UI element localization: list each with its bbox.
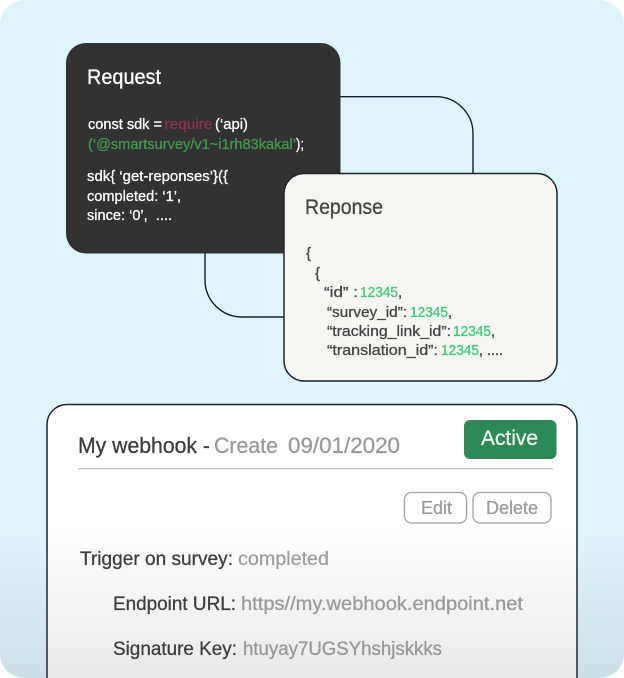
- code: response JSON: 12345: [410, 304, 448, 321]
- field: endpoint URL: [113, 593, 524, 615]
- panel: webhook card: [47, 404, 577, 678]
- heading: Request: Request: [87, 66, 161, 89]
- code: require statement: [88, 116, 304, 153]
- code: response JSON: ,: [491, 323, 495, 340]
- field: endpoint URL: Endpoint URL:: [113, 593, 236, 615]
- code: sdk call: [87, 168, 228, 224]
- code: response JSON: “tracking_link_id”:: [327, 323, 451, 340]
- field: trigger on survey: completed: [238, 548, 329, 570]
- code: response JSON: {: [306, 245, 311, 262]
- code: response JSON: {: [315, 265, 320, 282]
- badge: Active: [464, 420, 556, 459]
- code: response JSON: ,: [448, 304, 452, 321]
- code: sdk call: sdk{ ‘get-reponses’}({: [87, 168, 228, 185]
- connector lines between request and response cards: [205, 97, 473, 317]
- field: trigger on survey: [80, 548, 329, 570]
- code: require statement: const sdk =: [88, 116, 162, 133]
- heading: webhook title and date: Create: [214, 433, 278, 458]
- button: Edit: Edit: [421, 498, 452, 518]
- badge: Active: Active: [481, 427, 538, 450]
- heading: Reponse: Reponse: [305, 196, 383, 219]
- code: response JSON: , ....: [479, 342, 503, 359]
- code: require statement: (‘@smartsurvey/v1~i1rh83kakal’: [88, 136, 296, 153]
- code: sdk call: since: ‘0’, ....: [87, 207, 172, 224]
- code: response JSON: 12345: [453, 323, 491, 340]
- code: response JSON: ,: [398, 284, 402, 301]
- panel: response card: [284, 174, 557, 381]
- code: response JSON: 12345: [360, 284, 398, 301]
- panel: request card: [66, 43, 340, 254]
- button: Edit: [404, 492, 466, 523]
- code: response JSON: [306, 245, 503, 359]
- heading: webhook title and date: [78, 433, 400, 458]
- code: response JSON: “translation_id”:: [327, 342, 438, 359]
- button: Delete: Delete: [486, 498, 538, 518]
- code: require statement: );: [296, 136, 304, 153]
- field: signature key: htuyay7UGSYhshjskkks: [243, 638, 442, 660]
- heading: webhook title and date: 09/01/2020: [288, 433, 400, 458]
- field: endpoint URL: https//my.webhook.endpoint.net: [241, 593, 524, 615]
- field: signature key: [113, 638, 442, 660]
- heading: webhook title and date: My webhook -: [78, 433, 210, 458]
- field: signature key: Signature Key:: [113, 638, 237, 660]
- code: require statement: (‘api): [215, 116, 248, 133]
- code: response JSON: “id” :: [324, 284, 358, 301]
- field: trigger on survey: Trigger on survey:: [80, 548, 233, 570]
- button: Delete: [473, 492, 551, 523]
- code: response JSON: 12345: [441, 342, 479, 359]
- code: require statement: require: [164, 116, 212, 133]
- code: response JSON: “survey_id”:: [327, 304, 407, 321]
- code: sdk call: completed: ‘1’,: [87, 188, 181, 205]
